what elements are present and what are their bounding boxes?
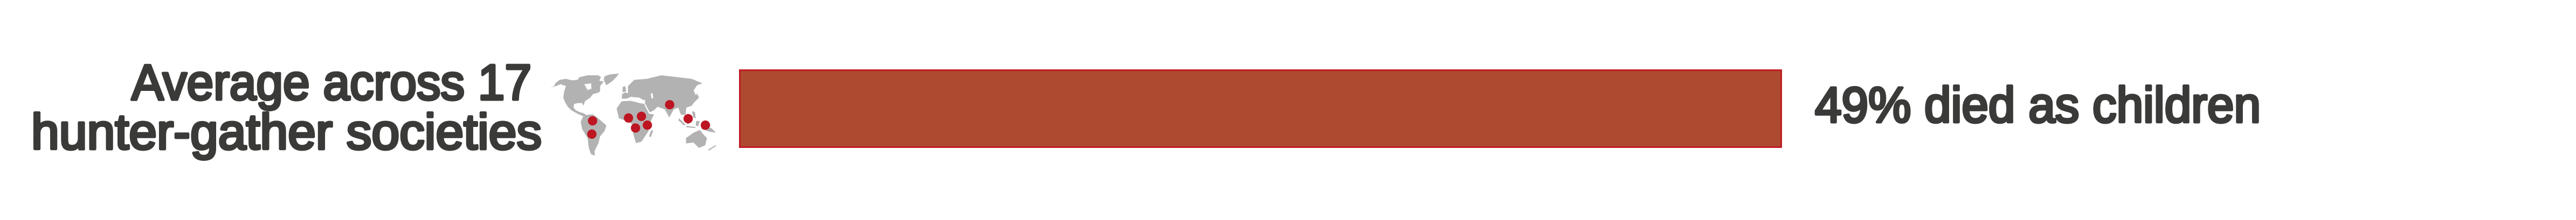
map land masses bbox=[550, 74, 716, 155]
location markers bbox=[587, 100, 710, 139]
row label bbox=[31, 54, 542, 160]
row label: hunter-gather societies bbox=[31, 104, 542, 160]
value label: 49% died as children bbox=[1815, 77, 2261, 133]
icon: world map with society locations bbox=[550, 74, 716, 155]
bar: 49% bbox=[740, 70, 1781, 147]
row label: Average across 17 bbox=[132, 54, 531, 110]
